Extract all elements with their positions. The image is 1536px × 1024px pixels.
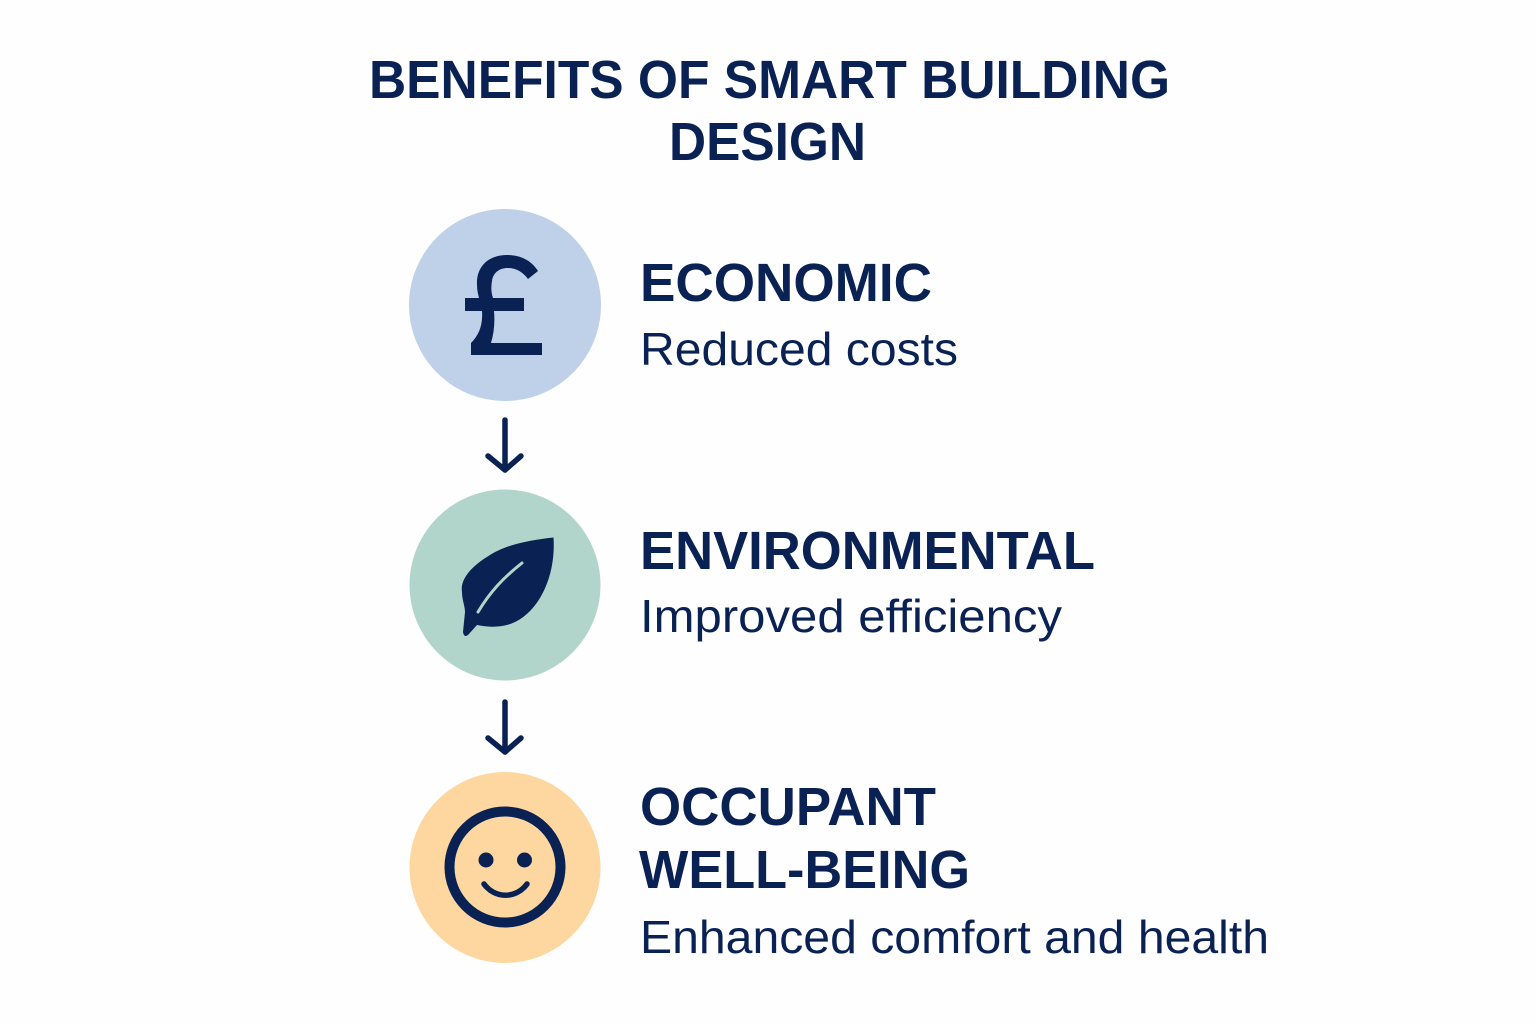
icon: pound sign <box>409 209 601 401</box>
heading: occupant well-being: WELL-BEING <box>639 840 970 900</box>
title: BENEFITS OF SMART BUILDING <box>369 50 1170 110</box>
icon: smiley face <box>410 772 600 963</box>
heading: economic: ECONOMIC <box>640 253 932 313</box>
title: DESIGN <box>669 112 866 172</box>
arrow: environmental to occupant well-being <box>488 702 521 752</box>
panel: environmental <box>410 490 1095 680</box>
panel: economic <box>409 209 958 401</box>
text: improved efficiency: Improved efficiency <box>640 590 1062 642</box>
text: enhanced comfort and health: Enhanced comfort and health <box>640 911 1269 963</box>
panel: occupant well-being <box>410 772 1269 963</box>
text: reduced costs: Reduced costs <box>640 323 958 375</box>
heading: occupant well-being <box>639 777 970 900</box>
icon: leaf <box>410 490 600 680</box>
title <box>369 50 1170 172</box>
arrow: economic to environmental <box>488 420 521 470</box>
heading: environmental: ENVIRONMENTAL <box>640 521 1095 581</box>
heading: occupant well-being: OCCUPANT <box>640 777 936 837</box>
